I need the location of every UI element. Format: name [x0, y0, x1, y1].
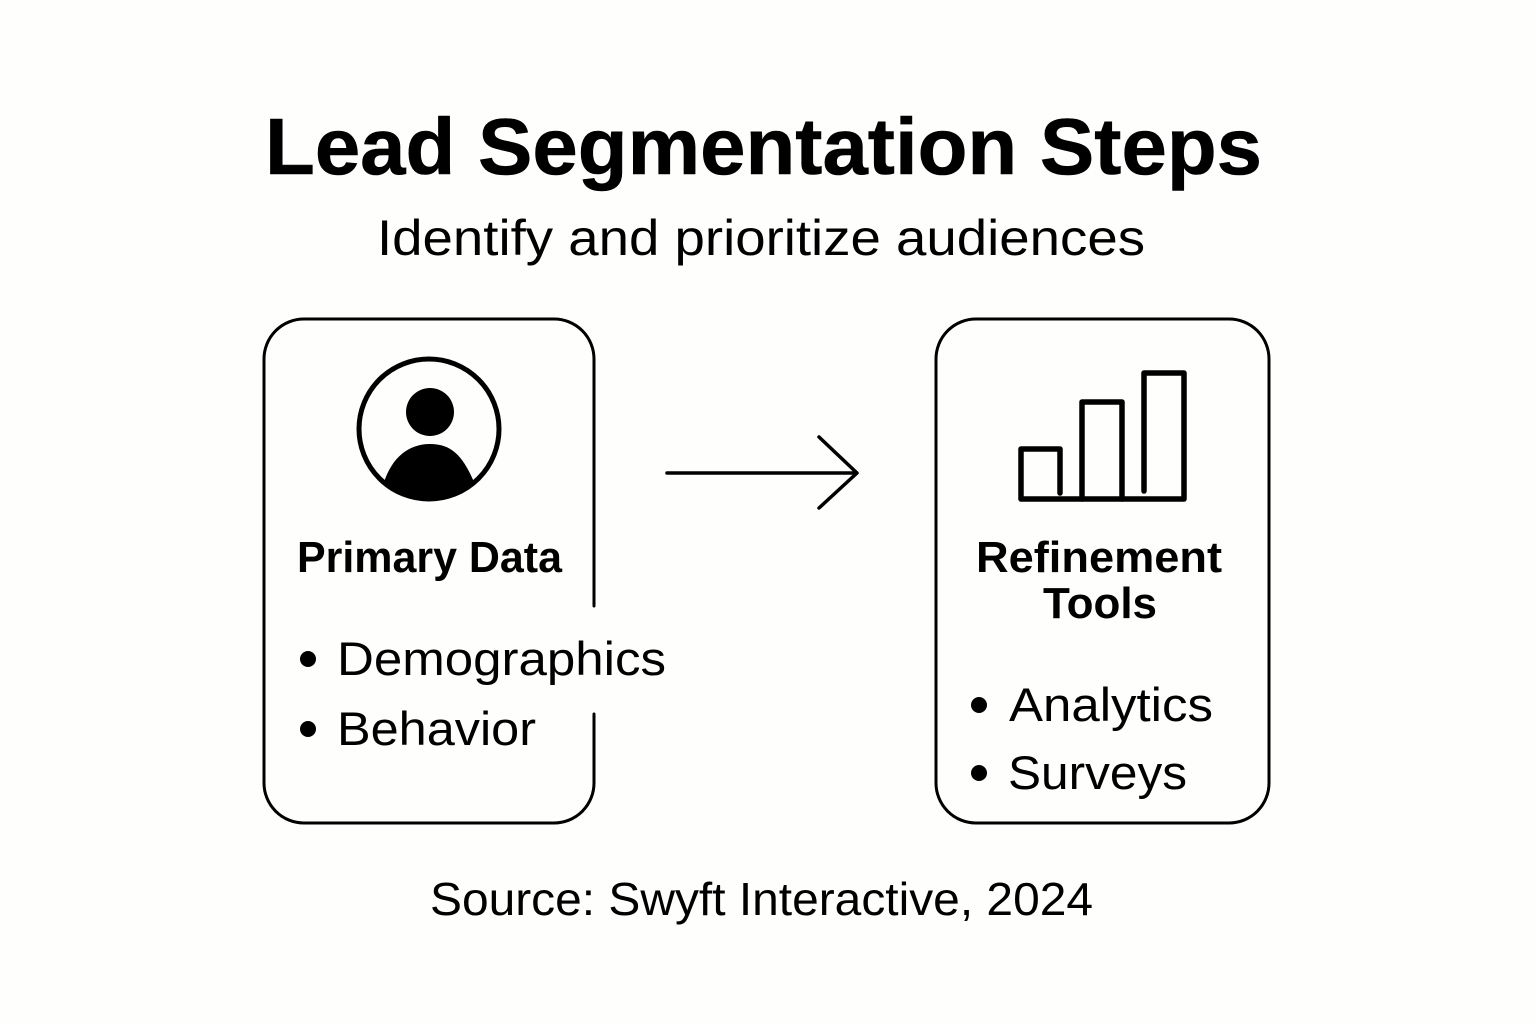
subtitle: Identify and prioritize audiences	[377, 210, 1145, 266]
panel outline	[936, 319, 1269, 823]
panel: refinement tools	[936, 319, 1269, 823]
icon: person avatar	[359, 359, 499, 505]
arrow	[667, 437, 857, 508]
heading: refinement tools: Refinement	[976, 533, 1222, 582]
list: refinement tools items: Surveys	[1008, 746, 1187, 799]
list: primary data items: Demographics	[337, 632, 666, 685]
heading: primary data: Primary Data	[297, 533, 563, 582]
title: Lead Segmentation Steps	[265, 102, 1262, 191]
list: refinement tools items	[971, 678, 1213, 799]
list: primary data items	[300, 632, 666, 755]
panel: refinement tools: Tools	[1043, 579, 1157, 628]
source note: Source: Swyft Interactive, 2024	[430, 873, 1093, 925]
panel: primary data	[264, 319, 666, 823]
list: refinement tools items: Analytics	[1009, 678, 1213, 731]
list: primary data items: Behavior	[337, 702, 536, 755]
icon: bar chart	[1021, 373, 1184, 499]
panel outline	[264, 319, 594, 823]
